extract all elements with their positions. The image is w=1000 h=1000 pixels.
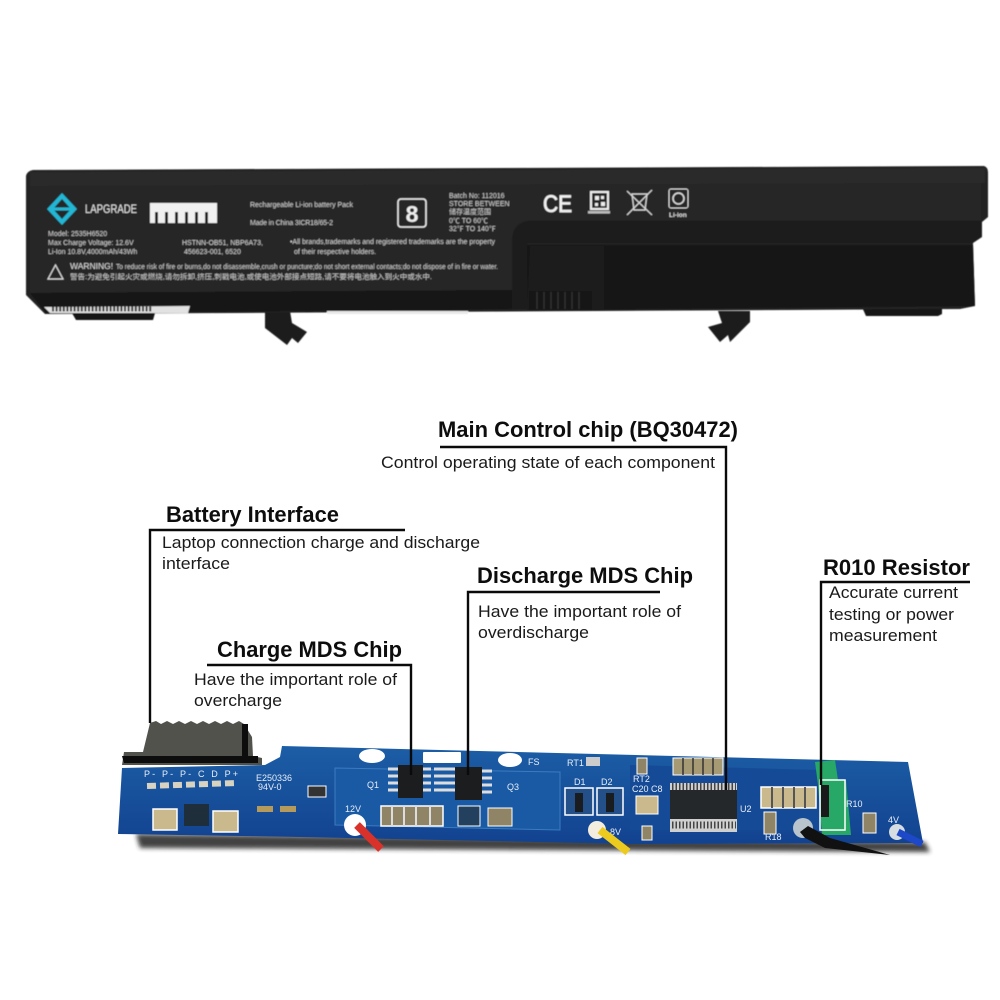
battery contact diagram bbox=[150, 203, 217, 223]
callout: R010 Resistor bbox=[821, 555, 970, 785]
description line 2: overcharge bbox=[194, 691, 282, 710]
label: specifications: Max Charge Voltage: 12.6V bbox=[48, 240, 134, 247]
battery body bbox=[26, 166, 988, 314]
icon: recycling square bbox=[588, 192, 610, 214]
warning text: 警告:为避免引起火灾或燃烧,请勿拆卸,挤压,刺戳电池,或使电池外部接点短路,请不要将电池触入到火中或水中. bbox=[70, 272, 432, 281]
label: specifications: Model: 2535H6520 bbox=[48, 231, 107, 238]
lower dark strip bbox=[30, 290, 512, 313]
component row bbox=[381, 806, 512, 826]
certification mark bbox=[398, 199, 426, 227]
connector block bbox=[527, 246, 604, 310]
silkscreen labels: Q3 bbox=[507, 782, 519, 792]
silkscreen labels bbox=[367, 757, 899, 842]
small components left bbox=[153, 786, 326, 832]
storage information: Batch No: 112016 bbox=[449, 193, 505, 200]
silkscreen labels: RT2 bbox=[633, 774, 650, 784]
label: specifications: HSTNN-OB51, NBP6A73, bbox=[182, 240, 263, 247]
callout: Main Control chip bbox=[381, 417, 738, 790]
description: Control operating state of each component bbox=[381, 453, 715, 472]
certification mark: 8 bbox=[406, 201, 419, 227]
silkscreen labels: R10 bbox=[846, 799, 863, 809]
description: Have the important role of bbox=[478, 602, 681, 621]
description: Accurate current bbox=[829, 583, 958, 602]
storage information: STORE BETWEEN bbox=[449, 201, 510, 208]
leader line bbox=[821, 582, 970, 785]
mid-board components bbox=[565, 757, 723, 840]
callout: Charge MDS Chip bbox=[194, 637, 411, 775]
icon: Li-ion recycling bbox=[669, 189, 688, 219]
silkscreen labels: D2 bbox=[601, 777, 613, 787]
battery interface connector bbox=[122, 721, 262, 765]
recessed section bbox=[512, 221, 981, 309]
battery top band bbox=[30, 168, 985, 186]
leader line bbox=[468, 592, 660, 775]
circuit board photo bbox=[118, 721, 930, 855]
description line 2: overdischarge bbox=[478, 623, 589, 642]
warning text: To reduce risk of fire or burns,do not disassemble,crush or puncture;do not short external contacts;do not dispose of in fire or water. bbox=[116, 264, 498, 271]
label: specifications: Li-Ion 10.8V,4000mAh/43Wh bbox=[48, 249, 137, 256]
label: specifications: •All brands,trademarks and registered trademarks are the property bbox=[290, 239, 496, 246]
blue wire bbox=[898, 832, 922, 844]
icon: Li-ion recycling: Li-ion bbox=[669, 212, 687, 219]
heading: R010 Resistor bbox=[823, 555, 970, 580]
silkscreen labels: R18 bbox=[765, 832, 782, 842]
battery feet bbox=[72, 307, 942, 320]
description line 3: measurement bbox=[829, 626, 937, 645]
black wire bbox=[800, 826, 890, 855]
rating text: 94V-0 bbox=[258, 782, 282, 792]
callout: Battery Interface bbox=[150, 502, 480, 723]
board shadow bbox=[136, 834, 930, 852]
heading: Battery Interface bbox=[166, 502, 339, 527]
copper area bbox=[335, 768, 560, 830]
label: specifications: 456623-001, 6520 bbox=[184, 249, 241, 256]
discharge MDS chip bbox=[434, 767, 492, 800]
warning text bbox=[48, 261, 498, 281]
solder holes bbox=[344, 814, 905, 840]
board codes: E250336 bbox=[256, 773, 292, 783]
silkscreen labels: FS bbox=[528, 757, 540, 767]
leader line bbox=[150, 530, 405, 723]
capacitors right bbox=[761, 787, 876, 834]
main control chip bbox=[670, 783, 737, 832]
silkscreen labels: D1 bbox=[574, 777, 586, 787]
leader line bbox=[440, 447, 726, 790]
barcode sticker bbox=[44, 306, 190, 313]
white edge highlight bbox=[327, 311, 468, 314]
label: specifications: Made in China 3ICR18/65-2 bbox=[250, 220, 333, 227]
logo: Lapgrade diamond bbox=[47, 193, 77, 225]
heading: Discharge MDS Chip bbox=[477, 563, 693, 588]
warning text: WARNING! bbox=[70, 261, 113, 271]
brand name: LAPGRADE bbox=[85, 202, 137, 216]
R010 resistor bbox=[815, 760, 851, 835]
battery clip right bbox=[708, 311, 750, 342]
label: specifications bbox=[48, 202, 496, 256]
white silkscreen ovals bbox=[359, 749, 522, 767]
silkscreen labels: C20 C8 bbox=[632, 784, 663, 794]
heading: Charge MDS Chip bbox=[217, 637, 402, 662]
silkscreen labels: RT1 bbox=[567, 758, 584, 768]
board body bbox=[118, 746, 923, 844]
silkscreen labels: 4V bbox=[888, 815, 899, 825]
description: Have the important role of bbox=[194, 670, 397, 689]
battery label face bbox=[30, 183, 981, 293]
12V label: 12V bbox=[345, 804, 361, 814]
storage information: 0℃ TO 60℃ bbox=[449, 217, 488, 225]
storage information: 储存温度范围 bbox=[449, 207, 491, 216]
label: specifications: Rechargeable Li-ion battery Pack bbox=[250, 202, 354, 209]
description: Laptop connection charge and discharge bbox=[162, 533, 480, 552]
connector pin labels: P- P- P- C D P+ bbox=[144, 769, 238, 779]
icon: crossed-out bin bbox=[627, 190, 652, 215]
charge MDS chip bbox=[388, 765, 431, 798]
connector teeth bbox=[529, 291, 592, 310]
storage information: 32℉ TO 140℉ bbox=[449, 225, 496, 233]
silkscreen labels: Q1 bbox=[367, 780, 379, 790]
description line 2: interface bbox=[162, 554, 230, 573]
heading: Main Control chip (BQ30472) bbox=[438, 417, 738, 442]
silkscreen labels: U2 bbox=[740, 804, 752, 814]
silkscreen labels: 8V bbox=[610, 827, 621, 837]
description line 2: testing or power bbox=[829, 605, 954, 624]
CE mark: CE bbox=[543, 191, 572, 218]
storage information bbox=[449, 193, 510, 233]
label: specifications: of their respective holders. bbox=[294, 249, 376, 256]
leader line bbox=[207, 665, 411, 775]
connector solder joints bbox=[147, 783, 236, 786]
yellow wire bbox=[600, 830, 628, 852]
callout: Discharge MDS Chip bbox=[468, 563, 693, 775]
red wire bbox=[357, 825, 381, 849]
battery pack photo bbox=[26, 166, 988, 345]
battery clip left bbox=[265, 311, 307, 345]
